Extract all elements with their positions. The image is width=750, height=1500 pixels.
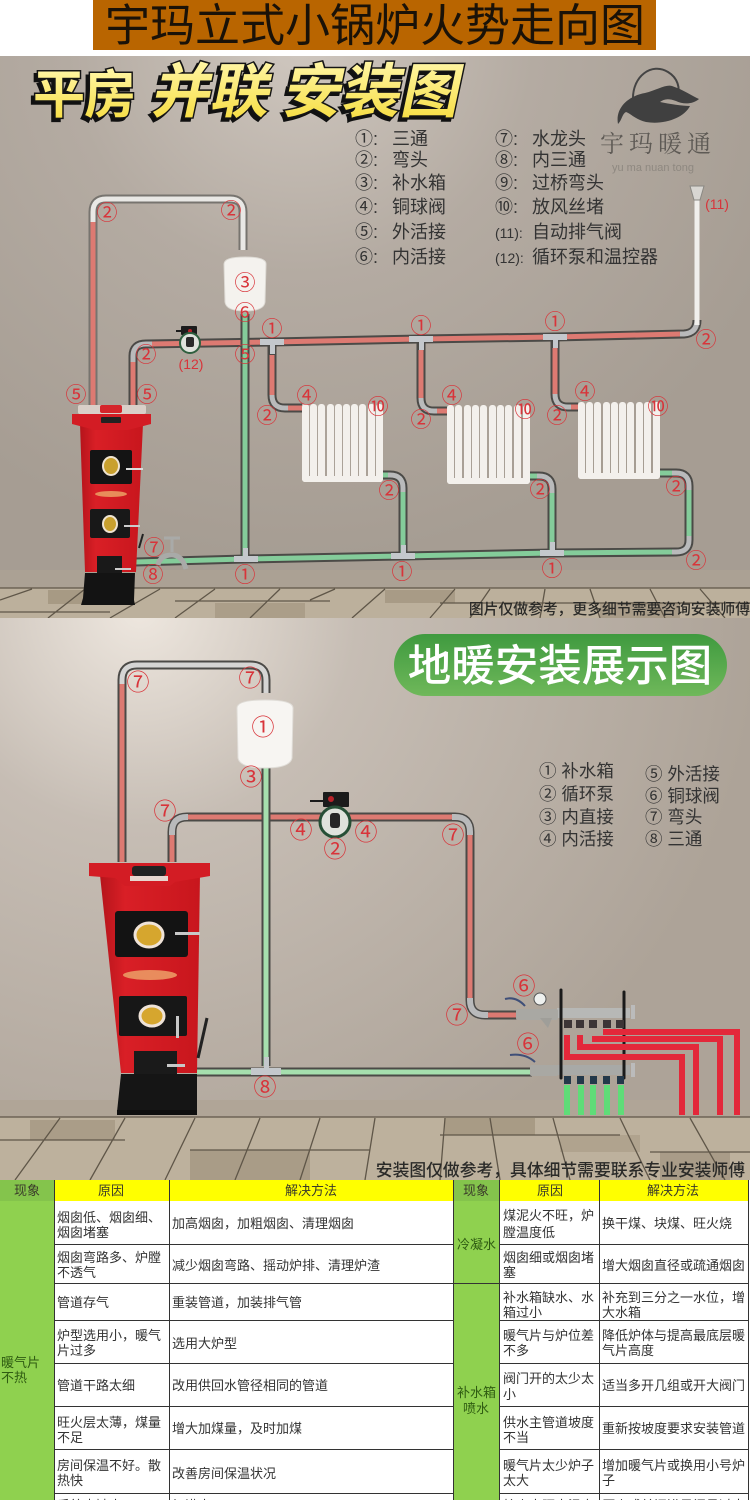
- left causes: 房间保温不好。散: [57, 1458, 161, 1473]
- pipe: green return: [197, 768, 532, 1075]
- right solutions: [602, 1216, 745, 1500]
- troubleshooting table: [0, 1180, 750, 1500]
- heading: bungalow parallel installation: 安装图: [278, 59, 469, 125]
- left causes: 旺火层太薄，煤量: [57, 1415, 161, 1430]
- legend: parts list 1-6: [355, 129, 446, 267]
- pipe: overflow from boiler to tank: [93, 199, 243, 410]
- left causes: 管道存气: [57, 1295, 109, 1310]
- right causes: 箱过小: [503, 1305, 542, 1320]
- legend: parts list 7-12: 内三通: [532, 150, 586, 170]
- left causes: 炉型选用小，暖气: [57, 1328, 161, 1343]
- part number labels 1: ⑥: [234, 302, 256, 325]
- right solutions: 补充到三分之一水位，增: [602, 1290, 745, 1305]
- make-up water tank 2: [237, 700, 293, 768]
- left solutions: 改善房间保温状况: [172, 1466, 276, 1481]
- pipe: red supply main: [133, 186, 704, 410]
- part number labels 1: ②: [220, 200, 242, 223]
- part number labels 1: ①: [392, 561, 412, 584]
- right causes: 煤泥火不旺，炉: [503, 1208, 594, 1223]
- right solutions: 适当多开几组或开大阀门: [602, 1378, 745, 1393]
- right causes: 小: [503, 1387, 516, 1402]
- water tap: [158, 538, 186, 569]
- heading: bungalow parallel installation: 平房: [33, 67, 135, 125]
- note: installation for reference: 安装图仅做参考，具体细节需要联系专业安装师傅: [376, 1161, 745, 1180]
- part number labels 1: ②: [96, 202, 118, 225]
- legend: parts list 7-12: ⑦:: [495, 129, 518, 149]
- left causes: 片过多: [57, 1343, 96, 1358]
- part number labels 1: ①: [262, 318, 282, 341]
- tee fittings: [234, 334, 567, 562]
- part number labels 2: ④: [354, 819, 378, 845]
- legend: parts list 1-6: 外活接: [392, 222, 446, 242]
- legend: parts list 7-12: ⑧:: [495, 150, 518, 170]
- part number labels 1: ②: [378, 480, 400, 503]
- pipe: green return main: [135, 314, 689, 562]
- pipe: red branches to radiators: [272, 340, 578, 411]
- part number labels 1: ②: [136, 344, 156, 367]
- right causes: 不当: [503, 1430, 529, 1445]
- circulation pump 2: [310, 792, 350, 837]
- table grid: [54, 1180, 748, 1500]
- legend: parts list 7-12: 水龙头: [532, 129, 586, 149]
- left symptom: radiator not hot: 不热: [1, 1370, 27, 1385]
- right causes: 补水箱缺水、水: [503, 1290, 594, 1305]
- part number labels 1: ⑩: [648, 396, 668, 419]
- legend: parts list 7-12: ⑩:: [495, 197, 518, 217]
- left solutions: 增大加煤量，及时加煤: [172, 1421, 302, 1436]
- part number labels 1: ③: [234, 272, 256, 295]
- left solutions: 重装管道，加装排气管: [172, 1295, 302, 1310]
- part number labels 2: ⑥: [516, 1031, 540, 1057]
- left causes: 管道干路太细: [57, 1378, 135, 1393]
- legend: parts list 1-6: ④:: [355, 197, 378, 217]
- legend: parts list 1-6: ⑤:: [355, 222, 378, 242]
- table header: 原因: [98, 1183, 124, 1198]
- radiator 1: [302, 404, 383, 482]
- note: diagram for reference: 图片仅做参考，更多细节需要咨询安装师傅: [469, 600, 750, 618]
- legend: parts list 1-6: 内活接: [392, 247, 446, 267]
- legend: parts list 1-6: 弯头: [392, 150, 428, 170]
- floor 2: [0, 1117, 750, 1180]
- part number labels 1: ②: [530, 479, 550, 502]
- table header: [0, 1180, 748, 1201]
- legend: floor heating parts: ⑤ 外活接: [645, 764, 720, 784]
- part number labels 1: ⑤: [136, 384, 158, 407]
- floor heating manifold: [505, 990, 635, 1084]
- table header: 解决方法: [285, 1183, 337, 1198]
- part number labels 1: ②: [546, 405, 568, 428]
- legend: parts list 1-6: ③:: [355, 173, 378, 193]
- right symptom: condensation: 冷凝水: [457, 1237, 496, 1252]
- legend: floor heating parts: ① 补水箱: [539, 761, 614, 781]
- logo: yu ma nuan tong teapot: yu ma nuan tong: [612, 162, 694, 174]
- legend: parts list 7-12: (12):: [495, 250, 524, 266]
- part number labels 2: ③: [240, 764, 262, 790]
- right causes: 阀门开的太少太: [503, 1371, 594, 1386]
- part number labels 1: ②: [686, 550, 706, 573]
- right solutions: 降低炉体与提高最底层暖: [602, 1328, 745, 1343]
- legend: floor heating parts: [539, 761, 720, 849]
- legend: floor heating parts: ④ 内活接: [539, 829, 614, 849]
- right causes: 暖气片与炉位差: [503, 1328, 594, 1343]
- part number labels 2: ⑦: [442, 822, 464, 848]
- heading pill: underfloor heating display: 地暖安装展示图: [408, 643, 712, 691]
- pipe: overflow to tank: [122, 665, 266, 862]
- part number labels 1: ④: [442, 385, 462, 408]
- legend: parts list 7-12: 循环泵和温控器: [532, 247, 658, 267]
- legend: parts list 7-12: [495, 129, 658, 267]
- right causes: 塞: [503, 1265, 516, 1280]
- panel: bungalow parallel installation diagram: [0, 56, 750, 618]
- part number labels 2: ⑦: [126, 669, 150, 695]
- right symptom: tank spraying: [457, 1385, 496, 1416]
- table header: 原因: [537, 1183, 563, 1198]
- legend: floor heating parts: ⑥ 铜球阀: [645, 786, 720, 806]
- legend: parts list 7-12: 过桥弯头: [532, 173, 604, 193]
- part number labels 1: (12): [179, 356, 203, 372]
- right solutions: 增大烟囱直径或疏通烟囱: [602, 1258, 745, 1273]
- left causes: [57, 1210, 161, 1500]
- left causes: 烟囱弯路多、炉膛: [57, 1250, 161, 1265]
- legend: parts list 1-6: ⑥:: [355, 247, 378, 267]
- left symptom: radiator not hot: [1, 1355, 40, 1385]
- legend: parts list 1-6: 补水箱: [392, 173, 446, 193]
- logo: yu ma nuan tong teapot: [600, 69, 716, 174]
- symptom column fills: [0, 1201, 499, 1500]
- part number labels 2: ⑥: [512, 973, 536, 999]
- boiler 1: [72, 405, 151, 605]
- right symptom: tank spraying: 喷水: [463, 1401, 489, 1416]
- part number labels 2: ④: [290, 817, 312, 843]
- legend: parts list 7-12: ⑨:: [495, 173, 518, 193]
- left causes: 烟囱堵塞: [57, 1225, 109, 1240]
- left solutions: 减少烟囱弯路、摇动炉排、清理炉渣: [172, 1258, 380, 1273]
- right solutions: 增加暖气片或换用小号炉: [602, 1458, 745, 1473]
- right solutions: 重新按坡度要求安装管道: [602, 1421, 745, 1436]
- floor heating green loops: [564, 1085, 624, 1115]
- panel: underfloor heating installation diagram: [0, 618, 750, 1180]
- part number labels 2: ⑧: [254, 1074, 276, 1100]
- table header: 解决方法: [647, 1183, 699, 1198]
- right causes: 烟囱细或烟囱堵: [503, 1250, 594, 1265]
- right causes: 不多: [503, 1343, 529, 1358]
- part number labels 1: ②: [410, 409, 432, 432]
- right causes: [503, 1208, 594, 1500]
- legend: parts list 1-6: ②:: [355, 150, 378, 170]
- legend: parts list 1-6: ①:: [355, 129, 378, 149]
- legend: floor heating parts: ② 循环泵: [539, 784, 614, 804]
- left solutions: 改用供回水管径相同的管道: [172, 1378, 328, 1393]
- circulation pump 1: [176, 326, 200, 353]
- part number labels 1: ②: [696, 329, 716, 352]
- left causes: 不透气: [57, 1265, 96, 1280]
- part number labels 1: ①: [410, 315, 432, 338]
- legend: parts list 1-6: 三通: [392, 129, 428, 149]
- legend: floor heating parts: ⑧ 三通: [645, 829, 702, 849]
- legend: parts list 7-12: 放风丝堵: [532, 197, 604, 217]
- left solutions: 加高烟囱，加粗烟囱、清理烟囱: [172, 1216, 354, 1231]
- heading: bungalow parallel installation: [33, 59, 469, 125]
- radiator 2: [447, 405, 530, 484]
- left symptom: radiator not hot: 暖气片: [1, 1355, 40, 1370]
- make-up water tank: [224, 257, 266, 311]
- part number labels 1: ⑩: [368, 396, 388, 419]
- left causes: 不足: [57, 1430, 83, 1445]
- right solutions: 子: [602, 1473, 615, 1488]
- part number labels 2: ①: [252, 714, 274, 740]
- logo: yu ma nuan tong teapot: 宇玛暖通: [600, 131, 716, 158]
- left solutions: 选用大炉型: [172, 1336, 237, 1351]
- right causes: 太大: [503, 1473, 529, 1488]
- pipe: red supply to manifold: [172, 817, 525, 1015]
- part number labels 1: ⑤: [234, 344, 256, 367]
- part number labels 1: ①: [544, 311, 566, 334]
- right solutions: 气片高度: [602, 1343, 654, 1358]
- title banner: 宇玛立式小锅炉火势走向图: [105, 0, 645, 51]
- legend: floor heating parts: ③ 内直接: [539, 807, 614, 827]
- part number labels 1: [66, 196, 729, 587]
- part number labels 1: ⑩: [514, 399, 536, 422]
- part number labels 1: (11): [705, 196, 729, 212]
- legend: parts list 1-6: 铜球阀: [392, 197, 446, 217]
- right solutions: 大水箱: [602, 1305, 641, 1320]
- radiator 3: [578, 402, 660, 479]
- legend: floor heating parts: ⑦ 弯头: [645, 807, 702, 827]
- right causes: 供水主管道坡度: [503, 1415, 594, 1430]
- part number labels 2: ⑦: [446, 1002, 468, 1028]
- floor heating red loops: [567, 1032, 737, 1115]
- right causes: 膛温度低: [503, 1225, 555, 1240]
- left solutions: [172, 1216, 380, 1500]
- left causes: 热快: [57, 1473, 83, 1488]
- part number labels 1: ①: [542, 558, 562, 581]
- legend: parts list 7-12: 自动排气阀: [532, 222, 622, 242]
- heading: bungalow parallel installation: 并联: [147, 59, 279, 125]
- part number labels 1: ⑧: [142, 564, 164, 587]
- part number labels 2: ⑦: [154, 798, 176, 824]
- table header: 现象: [14, 1183, 40, 1198]
- right solutions: 换干煤、块煤、旺火烧: [602, 1216, 732, 1231]
- part number labels 1: ④: [296, 385, 318, 408]
- part number labels 2: ⑦: [238, 665, 262, 691]
- floor 1: [0, 588, 750, 618]
- legend: parts list 7-12: (11):: [495, 225, 523, 241]
- part number labels 1: ②: [666, 476, 686, 499]
- boiler 2: [89, 863, 210, 1115]
- part number labels 2: ②: [324, 836, 346, 862]
- right symptom: tank spraying: 补水箱: [457, 1385, 496, 1400]
- right causes: 暖气片太少炉子: [503, 1458, 594, 1473]
- part number labels 1: ②: [256, 405, 278, 428]
- part number labels 1: ⑤: [66, 384, 86, 407]
- part number labels 2: [126, 665, 540, 1100]
- part number labels 1: ⑦: [144, 537, 164, 560]
- table header: 现象: [463, 1183, 489, 1198]
- part number labels 1: ①: [234, 564, 256, 587]
- part number labels 1: ④: [574, 381, 596, 404]
- left causes: 烟囱低、烟囱细、: [57, 1210, 161, 1225]
